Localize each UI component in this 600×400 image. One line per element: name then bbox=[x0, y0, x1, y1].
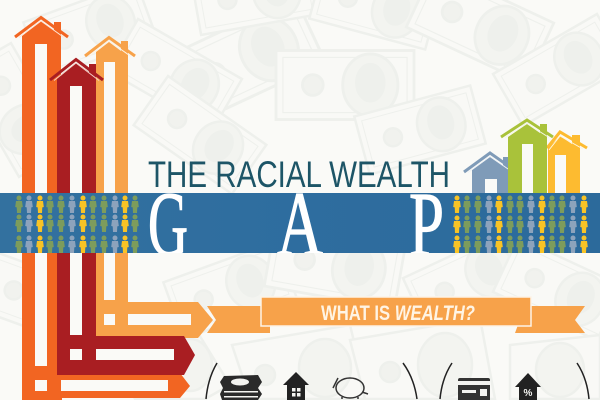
people row group: left bbox=[15, 196, 139, 253]
house: yellow bbox=[547, 132, 587, 193]
icon: stack of money bbox=[220, 375, 262, 400]
ribbon: what is wealth bbox=[207, 297, 585, 333]
house column: light orange bbox=[85, 38, 213, 338]
icon: house with percent bbox=[515, 373, 541, 400]
icon: credit card bbox=[458, 378, 490, 400]
house column: dark red bbox=[50, 60, 195, 375]
icon: piggy bank bbox=[333, 378, 368, 399]
house: grey-blue bbox=[464, 153, 510, 193]
house: green bbox=[501, 120, 553, 193]
blue band bbox=[0, 193, 600, 253]
heading: GAP bbox=[148, 173, 444, 275]
heading: GAP: A bbox=[277, 173, 323, 275]
title: the racial wealth: THE RACIAL WEALTH bbox=[148, 154, 450, 195]
heading: GAP: G bbox=[148, 173, 188, 275]
bracket: debts bbox=[440, 363, 589, 399]
house column: orange bbox=[15, 18, 190, 400]
percent sign: % bbox=[524, 388, 533, 399]
ribbon label: WHAT IS WEALTH? bbox=[321, 302, 475, 325]
people row group: right bbox=[453, 196, 588, 253]
bracket: assets bbox=[206, 363, 417, 399]
icon: house bbox=[283, 372, 309, 400]
